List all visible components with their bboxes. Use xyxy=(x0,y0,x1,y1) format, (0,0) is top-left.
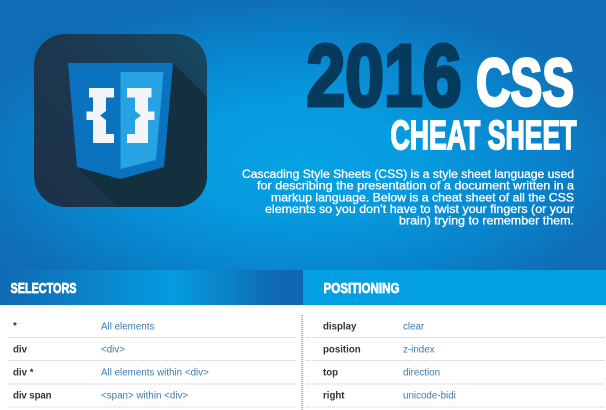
panel: positioning table: right xyxy=(323,390,345,402)
panel: selectors table xyxy=(13,321,209,402)
panel: selectors table: * xyxy=(13,321,17,332)
content background xyxy=(0,305,606,410)
intro paragraph: markup language. Below is a cheat sheet of all the CSS xyxy=(271,190,574,204)
intro paragraph: elements so you don’t have to twist your fingers (or your xyxy=(265,202,574,216)
panel: selectors table: div * xyxy=(13,368,34,378)
panel: selectors table: All elements within <div> xyxy=(101,368,209,378)
icon: shield highlight xyxy=(120,72,164,169)
icon: rounded tile xyxy=(34,34,207,207)
panel: selectors table: <span> within <div> xyxy=(101,390,188,402)
panel: positioning table: z-index xyxy=(403,344,435,356)
panel: selectors table: div span xyxy=(13,390,52,402)
panel: positioning table: top xyxy=(323,368,338,378)
intro paragraph xyxy=(242,167,574,227)
panel: positioning table: unicode-bidi xyxy=(403,390,456,402)
panel: selectors table: div xyxy=(13,344,28,356)
icon: long shadow xyxy=(77,63,207,207)
panel: positioning header xyxy=(303,270,606,305)
title: 2016: 2016 xyxy=(306,28,462,124)
panel: positioning table: display xyxy=(323,322,357,332)
hero background xyxy=(0,0,606,270)
heading: selectors: SELECTORS xyxy=(10,280,76,297)
intro paragraph: brain) trying to remember them. xyxy=(399,213,574,227)
panel: positioning table: direction xyxy=(403,368,440,378)
icon: shield xyxy=(68,63,173,179)
icon: curly braces xyxy=(86,88,154,143)
panel: positioning table: clear xyxy=(403,322,425,332)
panel: selectors table: <div> xyxy=(101,344,125,356)
intro paragraph: Cascading Style Sheets (CSS) is a style sheet language used xyxy=(242,167,574,181)
panel: positioning table: position xyxy=(323,344,361,356)
panel: selectors table: All elements xyxy=(101,322,154,332)
heading: positioning: POSITIONING xyxy=(324,280,400,297)
intro paragraph: for describing the presentation of a document written in a xyxy=(257,179,574,193)
panel: positioning table xyxy=(323,322,456,402)
icon: CSS shield app tile xyxy=(34,34,207,207)
panel: selectors header xyxy=(0,270,303,305)
